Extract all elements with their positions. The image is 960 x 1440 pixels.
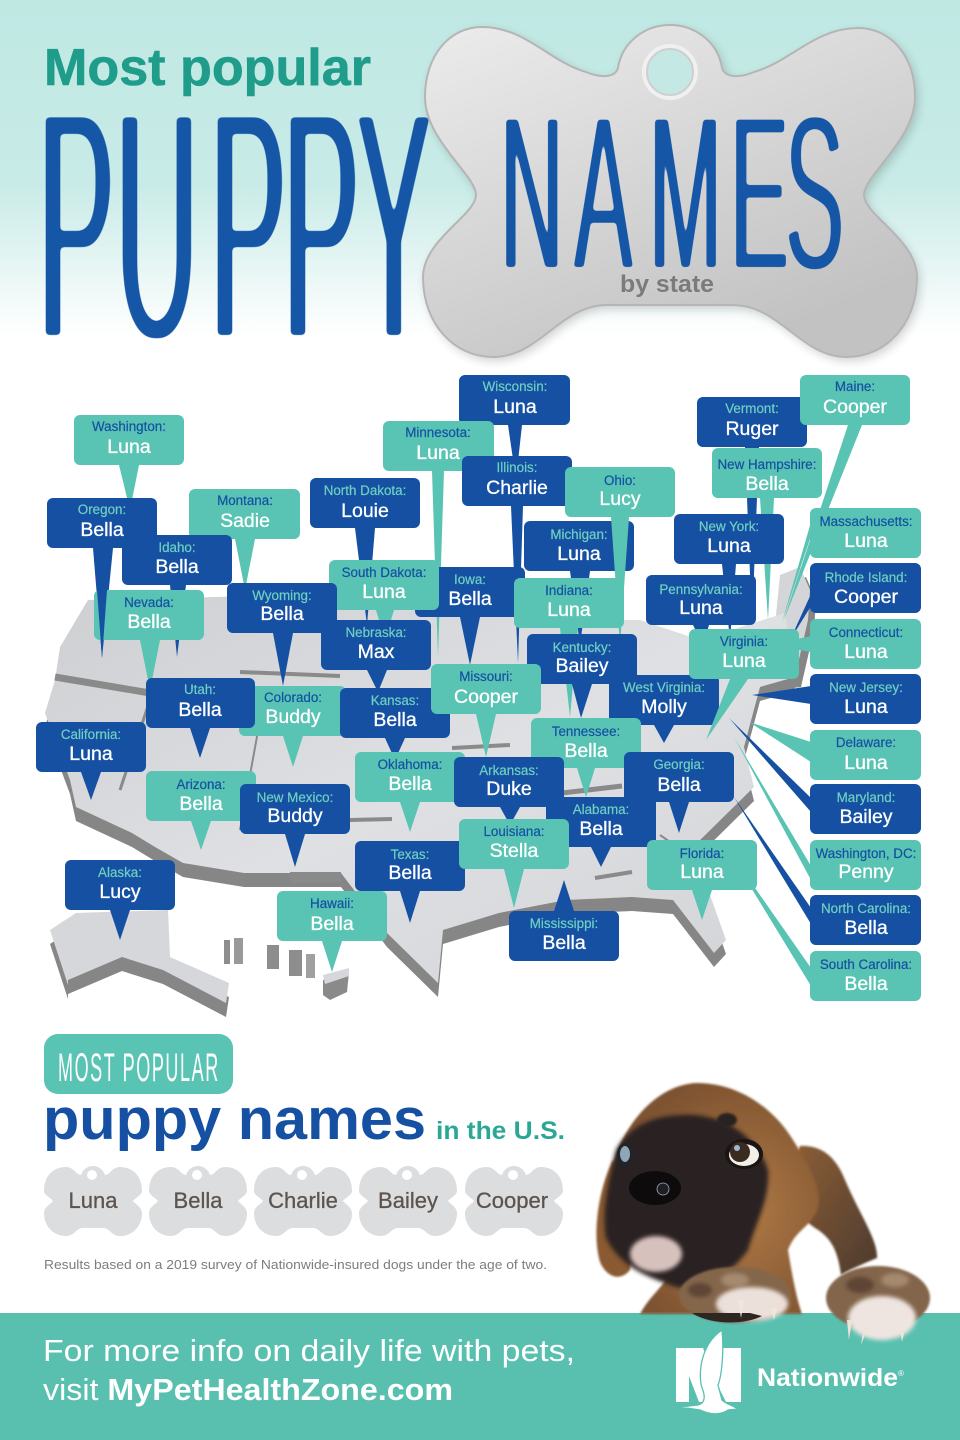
tag: South Carolina	[725, 845, 921, 1001]
tag: Iowa	[415, 567, 525, 665]
tag: Rhode Island: Cooper	[834, 586, 898, 608]
tag: Minnesota: Luna	[416, 442, 460, 464]
tag: Washington, DC: Penny	[838, 861, 894, 883]
map: Alaska	[50, 910, 229, 1017]
tag: New York: Luna	[707, 535, 751, 557]
tag: Oregon	[47, 498, 157, 658]
bone: Luna	[44, 1166, 142, 1236]
puppy: left ear	[596, 1160, 640, 1277]
tag: Hawaii: Hawaii:	[310, 896, 354, 911]
tag: Virginia: Virginia:	[720, 634, 768, 649]
tag: Idaho: Idaho:	[158, 540, 196, 555]
tag: West Virginia: West Virginia:	[623, 680, 705, 695]
tag: Missouri: Cooper	[454, 686, 518, 708]
tag: Minnesota	[383, 421, 494, 657]
tag: South Dakota: Luna	[362, 581, 406, 603]
tag: Utah: Utah:	[184, 682, 216, 697]
tag: New Jersey: Luna	[844, 696, 888, 718]
tag: Alabama: Bella	[579, 818, 623, 840]
puppy: right paw	[826, 1266, 930, 1345]
tag: New Mexico	[240, 784, 350, 867]
bone: Cooper: Cooper	[476, 1188, 548, 1213]
tag: Maryland: Maryland:	[837, 790, 895, 805]
bone tag graphic	[423, 25, 920, 361]
tag: Vermont: Ruger	[725, 418, 779, 440]
tag: Mississippi	[509, 880, 619, 961]
tag: Wyoming: Wyoming:	[252, 588, 312, 603]
puppy illustration	[596, 1083, 930, 1345]
tag: Virginia	[689, 629, 799, 740]
tag: Illinois: Illinois:	[497, 460, 537, 475]
footer call to action	[43, 1333, 575, 1407]
tag: Alabama	[546, 797, 656, 867]
tag: Massachusetts: Luna	[844, 530, 888, 552]
tag: Nevada	[94, 590, 204, 690]
tag: Michigan	[524, 521, 634, 645]
tag: Alaska: Alaska:	[98, 865, 142, 880]
logo: N with eagle	[676, 1330, 741, 1414]
tag: Oklahoma	[355, 752, 465, 832]
tag: Ohio	[565, 467, 675, 645]
tag: Oregon: Bella	[80, 519, 124, 541]
tag: Delaware: Delaware:	[836, 735, 896, 750]
tag: Hawaii: Bella	[310, 913, 354, 935]
tag: Vermont: Vermont:	[725, 401, 779, 416]
tag: Arkansas	[454, 757, 564, 825]
tag: Illinois: Charlie	[486, 477, 548, 499]
tag: North Dakota: Louie	[341, 500, 389, 522]
background gradient	[0, 0, 960, 335]
map of the United States	[45, 567, 816, 997]
tag: Colorado	[239, 686, 346, 767]
puppy: brow spot	[717, 1113, 737, 1127]
footer band	[0, 1313, 960, 1440]
tag: Maryland	[729, 718, 921, 834]
tag: Texas: Texas:	[391, 847, 429, 862]
tag: Louisiana: Louisiana:	[483, 824, 545, 839]
tag: Nevada: Bella	[127, 611, 171, 633]
tag: Ohio: Ohio:	[604, 473, 636, 488]
badge: MOST POPULAR	[44, 1034, 233, 1094]
tag: Alaska: Lucy	[99, 881, 141, 903]
tag: Oklahoma: Bella	[388, 773, 432, 795]
tag: New York	[674, 514, 784, 640]
title: PUPPY: PUPPY	[38, 44, 432, 410]
tag: Florida: Luna	[680, 861, 724, 883]
tag: Tennessee: Tennessee:	[552, 724, 620, 739]
tag: Colorado: Buddy	[265, 706, 321, 728]
puppy: right ear	[790, 1146, 877, 1275]
tag: North Carolina: North Carolina:	[821, 901, 911, 916]
tag: West Virginia	[609, 675, 719, 743]
tag: Kansas: Kansas:	[371, 693, 419, 708]
tag: Alaska	[65, 860, 175, 940]
tag: North Carolina: Bella	[844, 917, 888, 939]
tag: Idaho: Bella	[155, 556, 199, 578]
puppy: chin	[630, 1236, 682, 1272]
tag: Utah: Bella	[178, 699, 222, 721]
tag: Kentucky: Bailey	[555, 655, 609, 677]
tag: Connecticut	[770, 619, 921, 669]
tag: Georgia: Georgia:	[653, 757, 705, 772]
tag: Wyoming: Bella	[260, 603, 304, 625]
tag: Rhode Island	[790, 563, 921, 640]
tag: Tennessee	[531, 718, 641, 797]
tag: Montana: Sadie	[220, 510, 270, 532]
bone: Bella	[149, 1166, 247, 1236]
tag: Mississippi: Bella	[542, 932, 586, 954]
tag: Virginia: Luna	[722, 650, 766, 672]
tag: Pennsylvania: Pennsylvania:	[659, 582, 743, 597]
tag: Arizona	[146, 771, 256, 850]
bone: Bailey: Bailey	[378, 1188, 438, 1213]
tag: Michigan: Luna	[557, 543, 601, 565]
tag: Oregon: Oregon:	[78, 502, 126, 517]
tag: Kentucky: Kentucky:	[553, 640, 611, 655]
footer call to action: For more info on daily life with pets,	[43, 1333, 575, 1368]
tag: Oklahoma: Oklahoma:	[378, 757, 442, 772]
tag: Connecticut: Luna	[844, 641, 888, 663]
tag: New Jersey: New Jersey:	[829, 680, 903, 695]
puppy: nose	[629, 1171, 681, 1205]
tag: Washington: Luna	[107, 436, 151, 458]
tag: Vermont	[697, 397, 807, 625]
tag: Texas	[355, 841, 465, 923]
title: NAMES: NAMES	[500, 69, 844, 316]
tag: Pennsylvania: Luna	[679, 597, 723, 619]
tag: Florida: Florida:	[680, 846, 724, 861]
badge: MOST POPULAR: MOST POPULAR	[58, 1045, 218, 1090]
bone: Cooper	[465, 1166, 563, 1236]
logo: wordmark: Nationwide	[757, 1364, 898, 1392]
tag: North Dakota	[310, 478, 420, 625]
tag: Wisconsin: Wisconsin:	[483, 379, 547, 394]
tag: New Hampshire: Bella	[745, 473, 789, 495]
tag: Montana: Montana:	[217, 493, 273, 508]
tag: New Mexico: Buddy	[267, 805, 323, 827]
tag: California: Luna	[69, 743, 113, 765]
tag: Idaho	[122, 535, 232, 657]
tag: Georgia: Bella	[657, 774, 701, 796]
tag: Illinois	[462, 456, 572, 663]
tag: Wisconsin: Luna	[493, 396, 537, 418]
tag: Delaware	[749, 722, 921, 780]
tag: North Carolina	[734, 797, 921, 945]
tag: Delaware: Luna	[844, 752, 888, 774]
map: Hawaii islands	[224, 938, 349, 1000]
footer call to action: visit MyPetHealthZone.com	[43, 1372, 453, 1407]
tag: New Jersey	[752, 674, 921, 724]
puppy: eye right	[725, 1139, 763, 1169]
tag: Maine	[783, 375, 910, 622]
tag: Nebraska: Nebraska:	[345, 625, 407, 640]
Nationwide logo	[676, 1330, 904, 1414]
tag: Massachusetts	[782, 508, 921, 622]
tag: New Hampshire: New Hampshire:	[718, 457, 816, 472]
tag: South Dakota: South Dakota:	[342, 565, 426, 580]
tag: Kansas: Bella	[373, 709, 417, 731]
tag: Florida	[647, 840, 757, 920]
tag: Maine: Cooper	[823, 396, 887, 418]
tag: New York: New York:	[699, 519, 759, 534]
bone: Bella: Bella	[174, 1188, 223, 1213]
tag: Kansas	[340, 688, 450, 760]
Oregon pointer over Nevada	[97, 590, 107, 658]
tag: Washington, DC: Washington, DC:	[816, 846, 916, 861]
bone: Luna: Luna	[69, 1188, 118, 1213]
tag: California: California:	[61, 727, 121, 742]
tag: Ohio: Lucy	[599, 488, 641, 510]
tag: California	[36, 722, 146, 800]
tag: Iowa: Iowa:	[454, 572, 486, 587]
footnote: Results based on a 2019 survey of Nationwide-insured dogs under the age of two.	[44, 1257, 547, 1272]
tag: Missouri	[431, 664, 541, 757]
puppy: eye left	[617, 1143, 633, 1167]
tag: Arkansas: Arkansas:	[479, 763, 539, 778]
tag: Nebraska: Max	[358, 641, 395, 663]
heading: puppy names: puppy names	[43, 1087, 426, 1152]
heading: Most popular: Most popular	[44, 39, 371, 97]
tag: Nebraska	[321, 620, 431, 692]
tag: North Dakota: North Dakota:	[324, 483, 406, 498]
tag: Indiana: Luna	[547, 599, 591, 621]
tag: Washington	[74, 415, 184, 510]
bone: Charlie	[254, 1166, 352, 1236]
tag: Connecticut: Connecticut:	[829, 625, 903, 640]
tag: Massachusetts: Massachusetts:	[819, 514, 913, 529]
puppy: dark muzzle	[604, 1115, 768, 1288]
tag: Hawaii	[277, 891, 387, 972]
tag: Indiana: Indiana:	[545, 583, 593, 598]
tag: South Carolina: South Carolina:	[820, 957, 912, 972]
tag: South Dakota	[329, 560, 439, 640]
tag: West Virginia: Molly	[641, 696, 687, 718]
tag: Iowa: Bella	[448, 588, 492, 610]
tag: Kentucky	[527, 634, 637, 718]
tag: Colorado: Colorado:	[264, 690, 322, 705]
tag: Nevada: Nevada:	[124, 595, 174, 610]
tag: Maine: Maine:	[835, 379, 875, 394]
bone: Bailey	[359, 1166, 457, 1236]
tag: Maryland: Bailey	[839, 806, 893, 828]
tag: Minnesota: Minnesota:	[405, 425, 471, 440]
tag: Louisiana	[459, 819, 569, 908]
tag: Utah	[146, 678, 255, 758]
subtitle: by state: by state	[620, 271, 714, 298]
tag: Rhode Island: Rhode Island:	[825, 570, 907, 585]
tag: Georgia	[624, 752, 734, 833]
tag: Montana	[189, 489, 300, 590]
tag: Michigan: Michigan:	[550, 527, 608, 542]
heading: in the U.S.: in the U.S.	[436, 1117, 565, 1145]
tag: Washington: Washington:	[92, 419, 166, 434]
tag: Arkansas: Duke	[486, 778, 532, 800]
tag: Washington, DC	[734, 737, 921, 890]
tag: Mississippi: Mississippi:	[530, 916, 598, 931]
logo: registered mark: ®	[898, 1369, 904, 1378]
tag: New Mexico: New Mexico:	[257, 790, 333, 805]
puppy: left paw	[679, 1267, 791, 1323]
tag: Indiana	[514, 578, 624, 717]
tag: New Hampshire	[712, 448, 822, 620]
tag: Arizona: Bella	[179, 793, 223, 815]
bone: Charlie: Charlie	[268, 1188, 338, 1213]
tag: Tennessee: Bella	[564, 740, 608, 762]
tag: South Carolina: Bella	[844, 973, 888, 995]
tag: Wisconsin	[459, 375, 570, 480]
tag: Alabama: Alabama:	[573, 802, 629, 817]
tag: Louisiana: Stella	[490, 840, 539, 862]
puppy: head and neck	[612, 1083, 819, 1314]
tag: Pennsylvania	[646, 575, 756, 645]
tag: Missouri: Missouri:	[459, 669, 513, 684]
tag: Wyoming	[227, 583, 337, 686]
tag: Arizona: Arizona:	[176, 777, 226, 792]
tag: Texas: Bella	[388, 862, 432, 884]
